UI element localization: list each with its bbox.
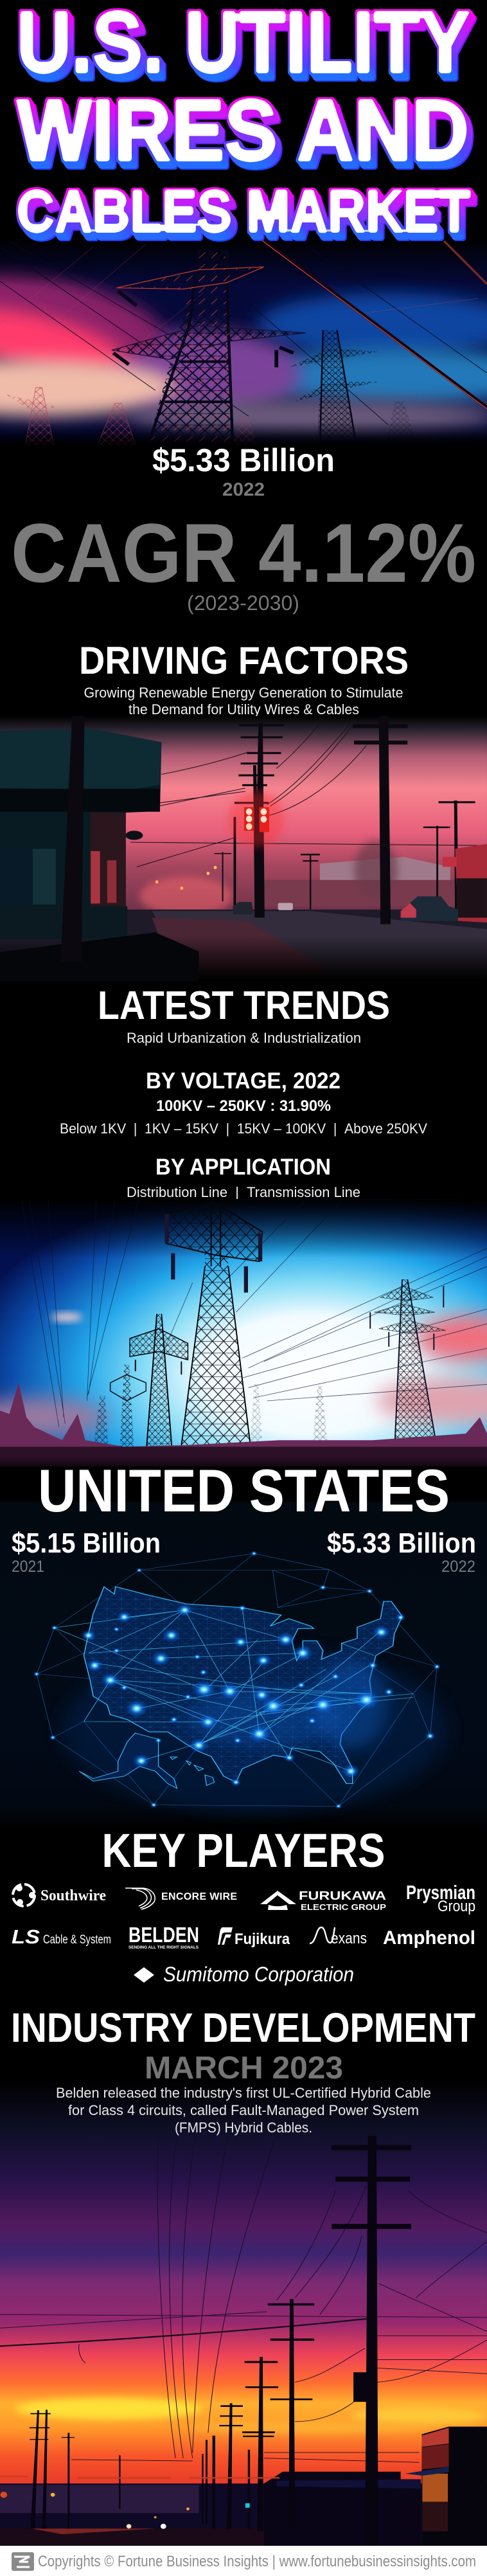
wires bbox=[130, 719, 487, 867]
development text: (FMPS) Hybrid Cables. bbox=[175, 2120, 312, 2136]
us value 2021 bbox=[12, 1527, 161, 1576]
us value 2021: $5.15 Billion bbox=[12, 1527, 161, 1559]
logo: Encore Wire: ENCORE WIRE bbox=[161, 1891, 237, 1902]
by application bbox=[127, 1155, 360, 1200]
us value 2021: 2021 bbox=[12, 1558, 44, 1576]
image: sunset power lines bbox=[0, 2080, 487, 2546]
road bbox=[0, 910, 487, 978]
logo: Amphenol: Amphenol bbox=[383, 1927, 475, 1949]
poles bbox=[60, 716, 475, 962]
secondary tower bbox=[289, 330, 379, 451]
market size 2022 bbox=[152, 442, 335, 500]
Alaska and Hawaii bbox=[79, 1733, 215, 1788]
logo: LS Cable & System: Cable & System bbox=[43, 1933, 111, 1947]
by voltage: 100KV – 250KV : 31.90% bbox=[156, 1097, 331, 1115]
driving factors heading: DRIVING FACTORS bbox=[79, 639, 409, 682]
distant pylons bbox=[93, 1365, 328, 1454]
cross-spans bbox=[0, 2476, 279, 2478]
wires bbox=[0, 239, 487, 425]
logo: Belden: SENDING ALL THE RIGHT SIGNALS bbox=[128, 1946, 199, 1950]
hero bottom fade bbox=[0, 432, 487, 447]
market size 2022: $5.33 Billion bbox=[152, 442, 335, 478]
glowing nodes bbox=[33, 1551, 441, 1809]
right pylon bbox=[370, 1279, 446, 1454]
logo: Fujikura bbox=[218, 1927, 290, 1948]
cars bbox=[233, 896, 458, 921]
key players heading: KEY PLAYERS bbox=[102, 1824, 385, 1877]
development text: Belden released the industry's first UL-Certified Hybrid Cable bbox=[56, 2085, 431, 2101]
footer bbox=[0, 2546, 487, 2576]
logo: LS Cable & System bbox=[12, 1925, 111, 1948]
logos bbox=[12, 1881, 475, 1986]
by voltage: Below 1KV | 1KV – 15KV | 15KV – 100KV | Above 250KV bbox=[60, 1121, 427, 1137]
logo: Nexans bbox=[310, 1927, 367, 1947]
by application: Distribution Line | Transmission Line bbox=[127, 1184, 360, 1200]
development text bbox=[56, 2085, 431, 2136]
wires bbox=[22, 1201, 487, 1427]
contiguous US bbox=[84, 1587, 402, 1783]
market size 2022: 2022 bbox=[222, 480, 265, 500]
logo: Furukawa: ELECTRIC GROUP bbox=[301, 1902, 386, 1912]
image: transmission towers at dusk bbox=[0, 239, 487, 452]
title bbox=[17, 0, 470, 244]
street lights bbox=[0, 2492, 250, 2529]
ground and buildings bbox=[0, 2427, 487, 2546]
right red building bbox=[443, 844, 487, 923]
logo: Furukawa: FURUKAWA bbox=[299, 1889, 386, 1902]
network lines bbox=[55, 1608, 413, 1771]
mid pylon bbox=[130, 1314, 188, 1455]
main pylon bbox=[166, 1201, 262, 1455]
wires bbox=[0, 2134, 487, 2462]
building left bbox=[0, 729, 199, 982]
logo: Sumitomo Corporation: Sumitomo Corporation bbox=[163, 1963, 354, 1986]
tree line bbox=[0, 1383, 487, 1473]
image: street at pink dusk bbox=[0, 716, 487, 982]
logo: Furukawa bbox=[260, 1889, 386, 1912]
logo: Encore Wire bbox=[125, 1888, 237, 1909]
footer logo bbox=[12, 2552, 34, 2571]
traffic lights bbox=[155, 791, 284, 890]
logo: Nexans: exans bbox=[331, 1930, 367, 1947]
far buildings bbox=[140, 841, 457, 916]
date: MARCH 2023 bbox=[145, 2051, 343, 2085]
panel: map background bbox=[0, 1502, 487, 1830]
logo: Prysmian bbox=[406, 1881, 475, 1915]
logo: Southwire: Southwire bbox=[40, 1887, 106, 1904]
us value 2022: 2022 bbox=[441, 1558, 475, 1576]
driving factors text: the Demand for Utility Wires & Cables bbox=[128, 701, 359, 717]
logo: Belden: BELDEN bbox=[128, 1923, 199, 1947]
logo: Prysmian: Group bbox=[438, 1898, 475, 1915]
latest trends heading: LATEST TRENDS bbox=[98, 984, 390, 1028]
logo: LS Cable & System: LS bbox=[12, 1925, 40, 1948]
driving factors text bbox=[84, 685, 403, 717]
main tower bbox=[112, 249, 306, 451]
driving factors text: Growing Renewable Energy Generation to Stimulate bbox=[84, 685, 403, 701]
logo: Southwire bbox=[13, 1884, 106, 1906]
map: network USA bbox=[33, 1551, 447, 1813]
distant towers bbox=[6, 388, 418, 447]
logo: Fujikura: Fujikura bbox=[235, 1931, 290, 1948]
latest trends text: Rapid Urbanization & Industrialization bbox=[127, 1030, 361, 1046]
by voltage bbox=[60, 1068, 427, 1137]
outer network bbox=[37, 1553, 437, 1806]
development text: for Class 4 circuits, called Fault-Managed Power System bbox=[68, 2102, 419, 2118]
image: pylons under blue sky bbox=[0, 1199, 487, 1473]
poles bbox=[30, 2136, 411, 2545]
CAGR: (2023-2030) bbox=[187, 591, 299, 615]
by application: BY APPLICATION bbox=[155, 1155, 331, 1180]
us value 2022 bbox=[327, 1527, 476, 1576]
by voltage: BY VOLTAGE, 2022 bbox=[146, 1068, 341, 1094]
